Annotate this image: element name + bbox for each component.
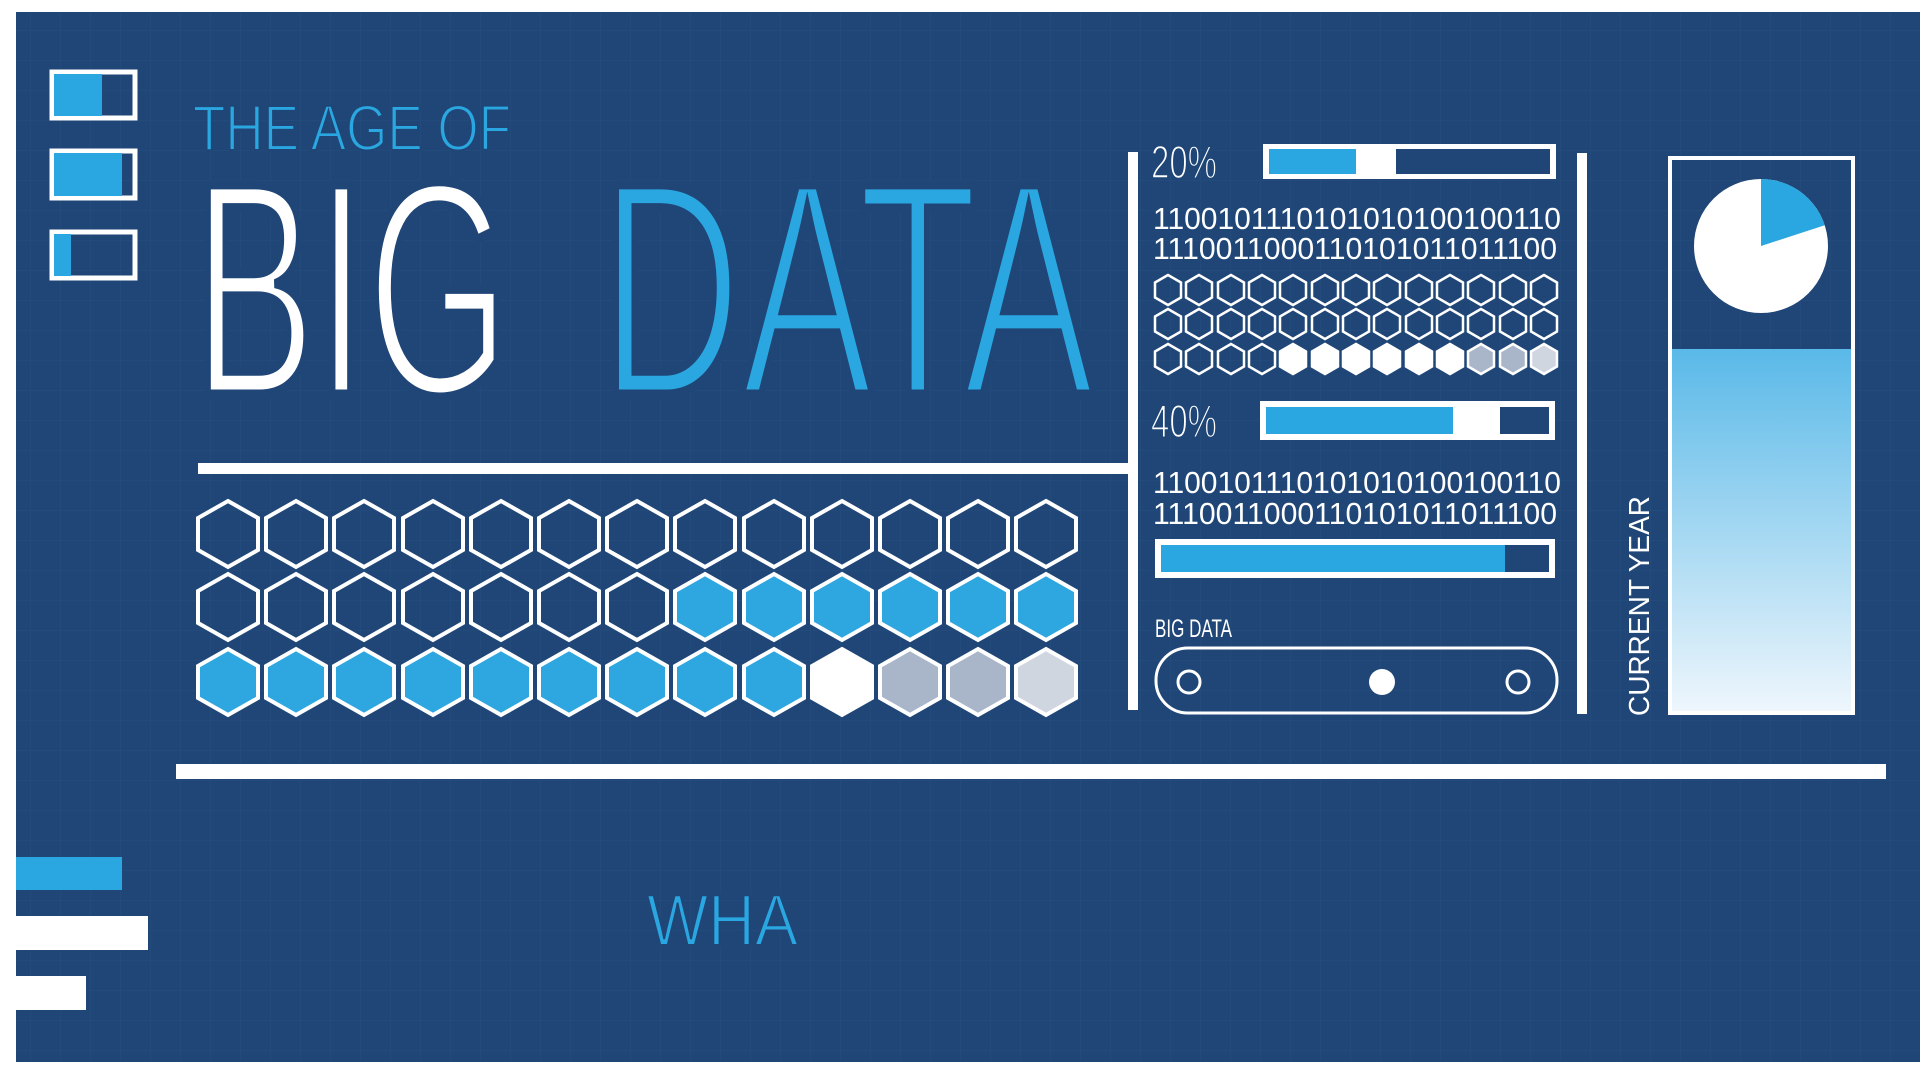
binary text 2: 1110011000110101011011100 [1153, 496, 1557, 531]
subtitle: the age of: THE AGE OF [193, 92, 511, 164]
binary text 2: 1100101110101010100100110 [1153, 465, 1561, 500]
binary text 1: 1100101110101010100100110 [1153, 201, 1561, 236]
label: 20%: 20% [1151, 136, 1217, 188]
title: big data: DATA [600, 120, 1095, 459]
label: big data: BIG DATA [1155, 615, 1232, 643]
icon: progress boxes [52, 72, 135, 278]
bar: long progress [1155, 539, 1555, 578]
chart: small hexagon grid [1155, 275, 1557, 374]
bar: 20% [1263, 144, 1556, 179]
chart: large hexagon grid [198, 501, 1076, 715]
binary text 1: 1110011000110101011011100 [1153, 231, 1557, 266]
pie chart [1694, 179, 1828, 313]
label: 40%: 40% [1151, 395, 1217, 447]
panel: statistics [1151, 136, 1561, 713]
label: current year: CURRENT YEAR [1624, 496, 1656, 716]
panel: current year chart [1670, 158, 1853, 713]
title: big data [193, 120, 1095, 459]
slider pill [1156, 648, 1557, 713]
binary text 2 [1153, 465, 1561, 531]
binary text 1 [1153, 201, 1561, 266]
bottom-left bars [16, 857, 148, 1010]
title: big data: BIG [193, 120, 510, 459]
bar: 40% [1260, 401, 1555, 440]
text: wha: WHA [647, 881, 798, 961]
